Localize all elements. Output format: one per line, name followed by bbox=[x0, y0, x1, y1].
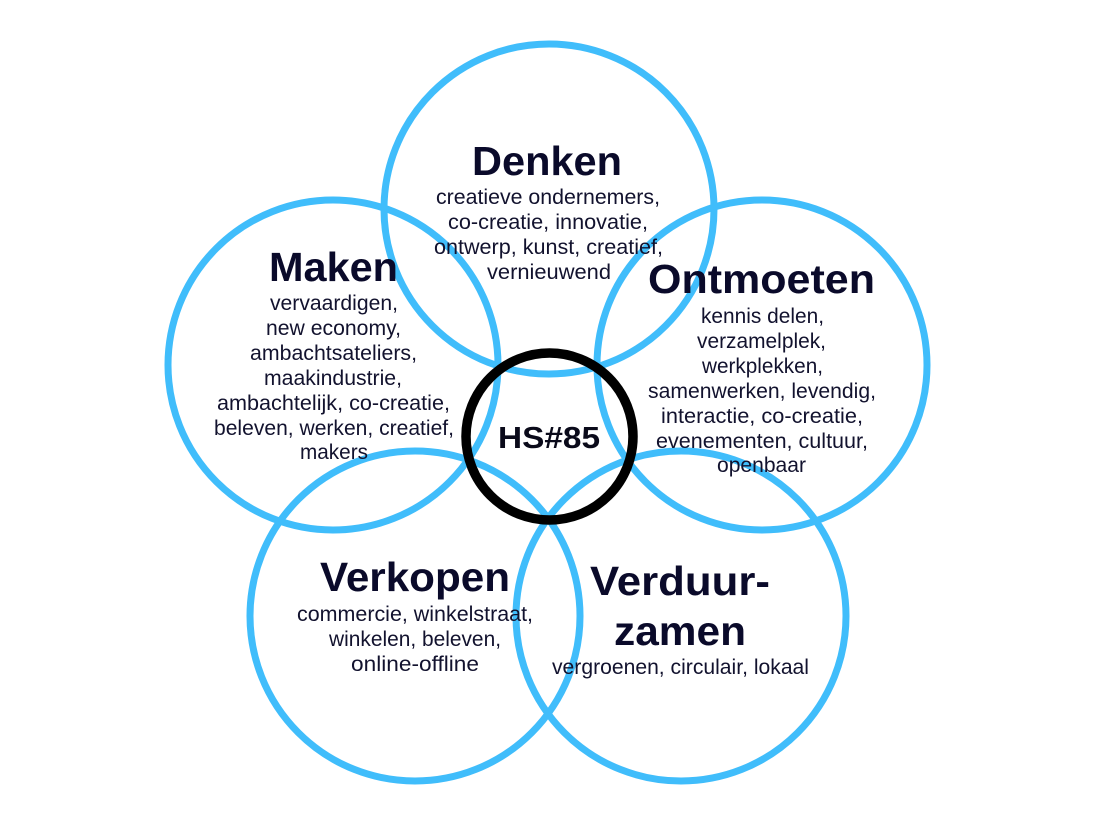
text: Ontmoeten keywords: openbaar bbox=[717, 454, 806, 477]
text: Verkopen keywords: commercie, winkelstraat, bbox=[297, 603, 533, 626]
text: Ontmoeten keywords: kennis delen, bbox=[701, 305, 824, 328]
heading: Verduurzamen: Verduur- bbox=[590, 558, 770, 604]
text: Maken keywords: ambachtsateliers, bbox=[250, 342, 417, 365]
circle: Maken bbox=[168, 200, 498, 530]
text: Denken keywords: co-creatie, innovatie, bbox=[448, 211, 648, 234]
text: Verkopen keywords: winkelen, beleven, bbox=[328, 628, 501, 651]
heading: Verduurzamen bbox=[590, 558, 770, 654]
text: Ontmoeten keywords: werkplekken, bbox=[701, 355, 823, 378]
text: Ontmoeten keywords: samenwerken, levendig, bbox=[648, 380, 876, 403]
circle: centre HS#85 bbox=[466, 353, 633, 520]
heading: Verkopen: Verkopen bbox=[320, 554, 510, 600]
text: Maken keywords: vervaardigen, bbox=[270, 292, 398, 315]
text: Ontmoeten keywords: interactie, co-creatie, bbox=[661, 405, 863, 428]
circle: Ontmoeten bbox=[597, 200, 927, 530]
text: Maken keywords: beleven, werken, creatief, bbox=[214, 417, 454, 440]
text: Denken keywords: creatieve ondernemers, bbox=[436, 186, 660, 209]
text: Ontmoeten keywords bbox=[648, 305, 876, 477]
text: Denken keywords: ontwerp, kunst, creatief, bbox=[434, 236, 663, 259]
text: Denken keywords: vernieuwend bbox=[487, 261, 611, 284]
text: Maken keywords: maakindustrie, bbox=[264, 367, 402, 390]
text: Verkopen keywords bbox=[297, 603, 533, 676]
circle: Verkopen bbox=[250, 451, 580, 781]
label: HS#85: HS#85 bbox=[498, 420, 600, 455]
text: Ontmoeten keywords: evenementen, cultuur, bbox=[656, 430, 868, 453]
heading: Denken: Denken bbox=[472, 138, 622, 184]
heading: Maken: Maken bbox=[269, 244, 398, 290]
text: Maken keywords: makers bbox=[300, 441, 368, 464]
text: Maken keywords: new economy, bbox=[266, 317, 401, 340]
heading: Verduurzamen: zamen bbox=[614, 608, 746, 654]
circle: Denken bbox=[384, 44, 714, 374]
text: Ontmoeten keywords: verzamelplek, bbox=[697, 330, 826, 353]
text: Verkopen keywords: online-offline bbox=[351, 653, 479, 676]
heading: Ontmoeten: Ontmoeten bbox=[648, 256, 875, 302]
text: Denken keywords bbox=[434, 186, 663, 284]
text: Verduurzamen keywords: vergroenen, circulair, lokaal bbox=[552, 656, 809, 679]
text: Maken keywords bbox=[214, 292, 454, 464]
circle: Verduurzamen bbox=[516, 451, 846, 781]
text: Maken keywords: ambachtelijk, co-creatie, bbox=[217, 392, 450, 415]
